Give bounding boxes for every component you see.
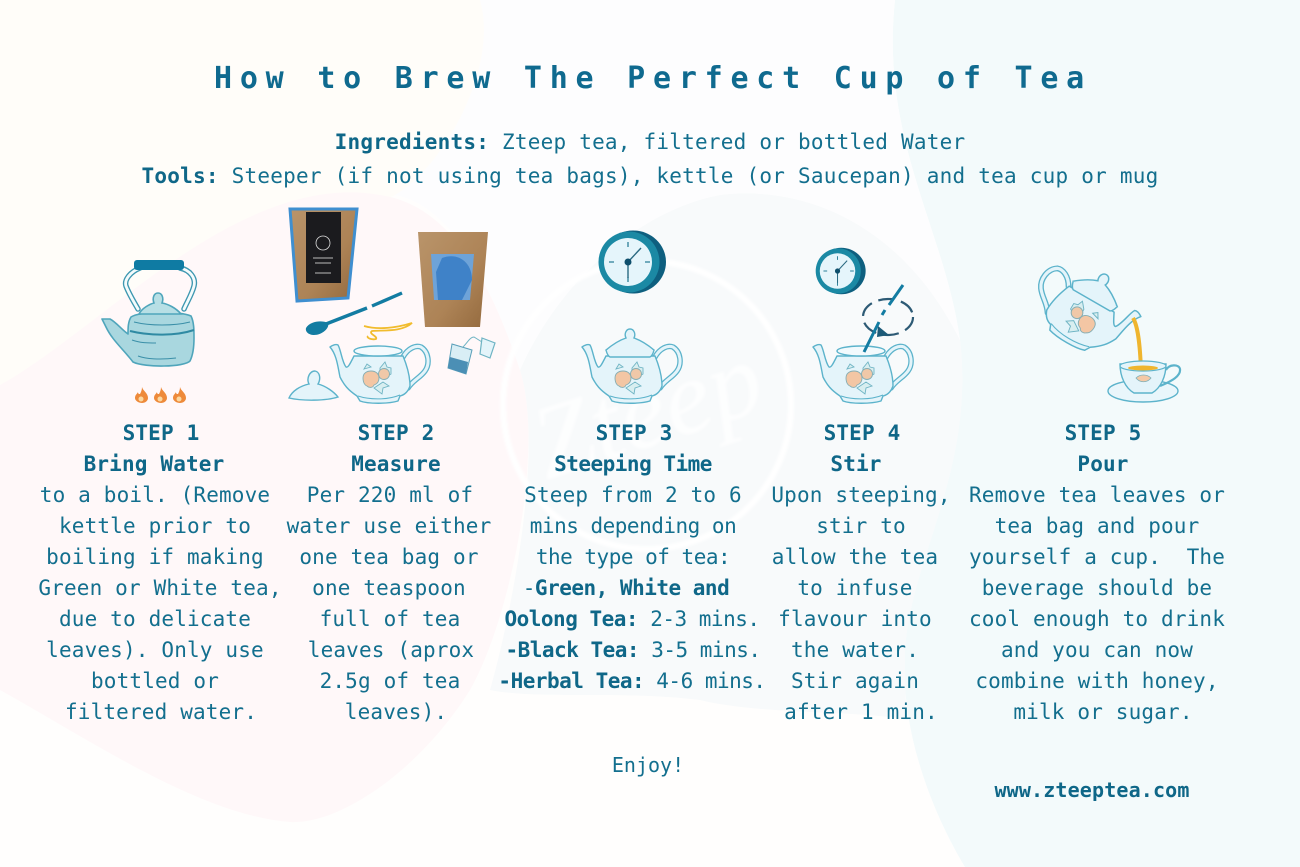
step 3 text: -Black Tea: 3-5 mins. [505,638,760,662]
step 3 text: Oolong Tea: 2-3 mins. [504,607,760,631]
step 1 text: STEP 1 [123,421,199,445]
website: www.zteeptea.com [994,778,1190,802]
step 1 text: kettle prior to [59,514,251,538]
background blobs and watermark: Zteep [517,318,776,502]
step 4 text [771,421,951,724]
step 5 text: STEP 5 [1065,421,1141,445]
step 1 text: filtered water. [65,700,257,724]
step 1 text: bottled or [91,669,219,693]
step 1 text: due to delicate [59,607,251,631]
step 3 text: Steeping Time [554,452,712,476]
step 5 text: beverage should be [982,576,1212,600]
step 3 text: -Herbal Tea: 4-6 mins. [498,669,766,693]
closing line: Enjoy! [612,753,684,777]
step 3 text: STEP 3 [596,421,672,445]
step 3 text: the type of tea: [536,545,730,569]
step 2 text: Measure [351,452,441,476]
step 5 text: Remove tea leaves or [969,483,1225,507]
step 2 text [286,421,491,724]
step 2 text: leaves). [345,700,447,724]
step 1 text [38,421,282,724]
step 4 text: STEP 4 [824,421,900,445]
step 2 text: leaves (aprox [308,638,474,662]
step 5 text: milk or sugar. [1013,700,1193,724]
step 4 text: Stir [830,452,882,476]
icon: pouring teapot and cup [1021,248,1180,402]
step 4 text: Stir again [791,669,919,693]
step 4 text: flavour into [778,607,932,631]
step 1 text: boiling if making [46,545,264,569]
step 5 text: and you can now [1001,638,1193,662]
step 5 text: tea bag and pour [995,514,1199,538]
step 2 text: one teaspoon [312,576,466,600]
step 5 text: cool enough to drink [969,607,1225,631]
icon: clock, teapot and stirring spoon [813,248,913,403]
step 1 text: Bring Water [84,452,224,476]
title: How to Brew The Perfect Cup of Tea [214,61,1092,96]
step 1 text: leaves). Only use [46,638,264,662]
step 2 text: 2.5g of tea [320,669,460,693]
step 3 text: mins depending on [530,514,736,538]
step 4 text: the water. [791,638,919,662]
step 3 text: -Green, White and [523,576,729,600]
icon: clock and teapot [582,230,680,403]
step 4 text: stir to [816,514,906,538]
icon: kettle on flames [102,260,194,403]
icon: tea packets, spoon, teapot and lid [289,209,495,403]
step 3 text: Steep from 2 to 6 [524,483,742,507]
step 5 text [969,421,1225,724]
step 4 text: to infuse [797,576,913,600]
step 5 text: yourself a cup. The [969,545,1225,569]
step 2 text: Per 220 ml of [307,483,473,507]
step 4 text: Upon steeping, [771,483,951,507]
step 5 text: combine with honey, [975,669,1219,693]
step 2 text: full of tea [320,607,460,631]
step 5 text: Pour [1077,452,1129,476]
step 1 text: Green or White tea, [38,576,282,600]
step 2 text: one tea bag or [299,545,479,569]
ingredients and tools: Tools: Steeper (if not using tea bags), kettle (or Saucepan) and tea cup or mug [142,164,1158,188]
step 2 text: water use either [287,514,491,538]
step 1 text: to a boil. (Remove [40,483,270,507]
ingredients and tools [142,130,1158,188]
ingredients and tools: Ingredients: Zteep tea, filtered or bottled Water [335,130,965,154]
step 2 text: STEP 2 [358,421,434,445]
step 3 text [498,421,766,693]
step 4 text: after 1 min. [784,700,938,724]
step 4 text: allow the tea [772,545,938,569]
